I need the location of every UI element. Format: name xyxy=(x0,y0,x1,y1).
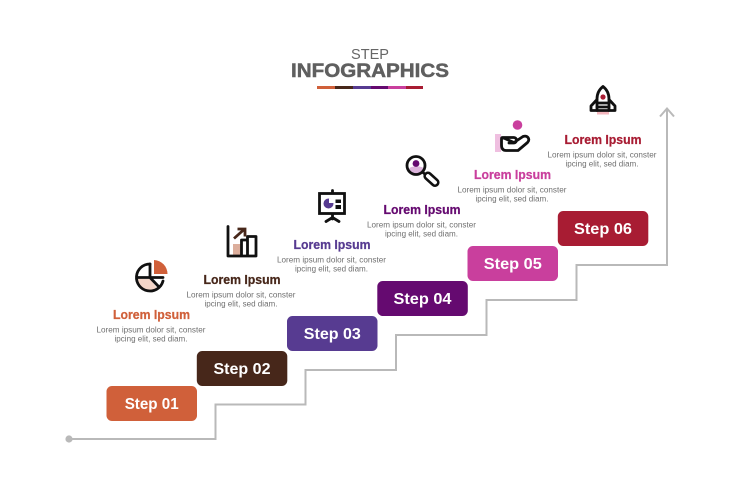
text block: step 06 xyxy=(548,132,657,168)
text block: step 02: ipcing elit, sed diam. xyxy=(204,300,278,308)
title: STEP xyxy=(351,47,389,63)
text block: step 02: Lorem Ipsum xyxy=(204,272,280,287)
icon: pie chart xyxy=(136,260,168,292)
staircase arrow line xyxy=(65,108,674,443)
text block: step 03: Lorem ipsum dolor sit, conster xyxy=(277,256,386,264)
title: INFOGRAPHICS xyxy=(291,61,449,82)
step 03 button: Step 03 xyxy=(304,326,361,343)
step 04 button: Step 04 xyxy=(394,291,452,308)
step 06 button xyxy=(558,211,648,246)
icon: rocket xyxy=(591,86,615,114)
icon: presentation board xyxy=(320,190,344,222)
text block: step 04: ipcing elit, sed diam. xyxy=(385,230,458,238)
text block: step 01: Lorem ipsum dolor sit, conster xyxy=(96,326,206,334)
text block: step 05: ipcing elit, sed diam. xyxy=(476,194,548,204)
text block: step 06: Lorem Ipsum xyxy=(564,132,642,147)
title xyxy=(291,47,449,82)
text block: step 01 xyxy=(96,307,206,344)
step 05 button: Step 05 xyxy=(484,256,542,273)
title color bar xyxy=(317,86,423,89)
text block: step 03: ipcing elit, sed diam. xyxy=(295,264,368,274)
icon: magnifier with person xyxy=(407,156,440,187)
text block: step 05 xyxy=(458,167,567,204)
step 06 button: Step 06 xyxy=(574,221,632,238)
text block: step 04 xyxy=(367,202,476,238)
text block: step 02 xyxy=(186,272,296,308)
text block: step 01: ipcing elit, sed diam. xyxy=(114,334,188,344)
step 01 button xyxy=(106,386,197,421)
text block: step 01: Lorem Ipsum xyxy=(113,307,190,322)
text block: step 04: Lorem Ipsum xyxy=(384,202,460,217)
icon: bar chart with arrow xyxy=(228,226,256,256)
step 01 button: Step 01 xyxy=(125,396,179,413)
step 02 button xyxy=(197,351,287,386)
text block: step 04: Lorem ipsum dolor sit, conster xyxy=(367,220,476,230)
step 05 button xyxy=(468,246,558,281)
step 04 button xyxy=(377,281,468,316)
icon: hand with dot xyxy=(495,120,529,152)
step 03 button xyxy=(287,316,378,351)
text block: step 03 xyxy=(277,237,386,274)
text block: step 06: ipcing elit, sed diam. xyxy=(566,160,638,168)
step 02 button: Step 02 xyxy=(214,361,270,378)
text block: step 02: Lorem ipsum dolor sit, conster xyxy=(186,290,296,300)
text block: step 05: Lorem Ipsum xyxy=(474,167,551,182)
text block: step 03: Lorem Ipsum xyxy=(294,237,370,252)
text block: step 06: Lorem ipsum dolor sit, conster xyxy=(548,150,657,160)
text block: step 05: Lorem ipsum dolor sit, conster xyxy=(458,186,567,194)
